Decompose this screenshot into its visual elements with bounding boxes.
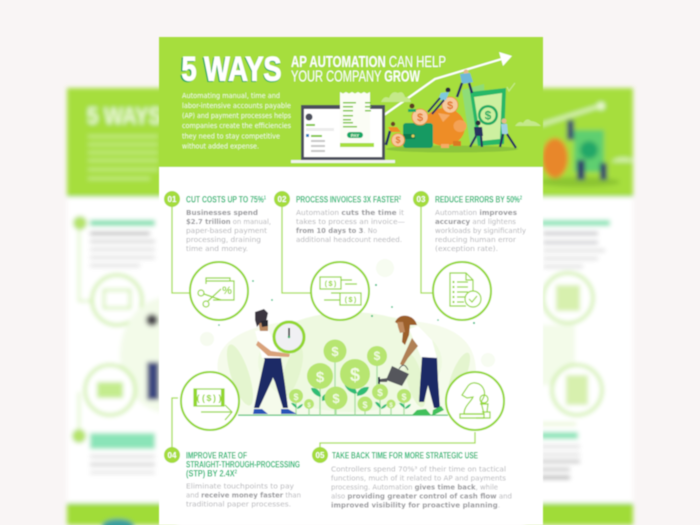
badge 03: 03 bbox=[417, 195, 426, 204]
icon: document with check bbox=[433, 262, 491, 320]
title: 5 WAYS: 5 WAYS bbox=[182, 50, 282, 88]
icon: coins: $ bbox=[395, 135, 401, 145]
heading 01: CUT COSTS UP TO 75% bbox=[186, 194, 294, 206]
body 03 bbox=[435, 209, 526, 253]
subtitle bbox=[291, 54, 446, 86]
panel: blurred back page left bbox=[67, 88, 216, 525]
body 02: Automation cuts the time it bbox=[296, 209, 404, 217]
panel: blurred back page left: 5 WAYS bbox=[87, 103, 162, 130]
section 04 bbox=[164, 372, 301, 508]
icon: clouds bbox=[381, 83, 541, 126]
heading 03: REDUCE ERRORS BY 50% bbox=[435, 194, 556, 206]
body 03: reducing human error bbox=[435, 236, 516, 244]
body 05: functions, much of it related to AP and payments bbox=[331, 474, 506, 482]
body 03: (exception rate). bbox=[435, 245, 498, 253]
body 02: additional headcount needed. bbox=[296, 236, 402, 244]
figure: man with clock bbox=[253, 309, 304, 414]
figure: woman watering bbox=[378, 316, 444, 416]
subtitle: AP AUTOMATION CAN HELP bbox=[291, 54, 446, 71]
illustration: money garden: $ bbox=[374, 349, 381, 363]
body 03: workloads by significantly bbox=[435, 227, 526, 235]
icon: piggy bank bbox=[423, 108, 466, 148]
icon: laptop bbox=[291, 105, 395, 163]
panel: main page bbox=[159, 37, 543, 525]
heading 04: (STP) BY 2.4X bbox=[186, 468, 249, 480]
body 04 bbox=[186, 482, 301, 508]
heading 05: TAKE BACK TIME FOR MORE STRATEGIC USE bbox=[332, 450, 478, 462]
body 04: traditional paper processes. bbox=[186, 500, 291, 508]
body 01: processing, draining bbox=[186, 236, 261, 244]
icon: invoices with dollar: ($) bbox=[324, 281, 337, 289]
body 05 bbox=[331, 466, 512, 510]
badge 04: 04 bbox=[168, 451, 177, 460]
illustration: money garden: $ bbox=[331, 344, 339, 359]
icon: watering can bbox=[378, 365, 409, 386]
illustration: money garden: $ bbox=[401, 392, 407, 402]
illustration: money garden: $ bbox=[332, 391, 340, 406]
body 03: Automation improves bbox=[435, 209, 517, 217]
panel: header banner bbox=[159, 37, 543, 167]
heading 03: 2 bbox=[520, 196, 522, 202]
icon: coins bbox=[392, 97, 458, 146]
icon: receipt bbox=[340, 92, 374, 149]
icon: coins: $ bbox=[447, 100, 453, 112]
body 03: accuracy and lightens bbox=[435, 218, 516, 226]
plant leaves bbox=[291, 383, 411, 409]
heading 04 bbox=[186, 450, 300, 480]
body 02: takes to process an invoice— bbox=[296, 218, 405, 226]
illustration: money garden bbox=[200, 259, 495, 416]
intro text bbox=[182, 92, 291, 150]
body 01 bbox=[186, 209, 271, 253]
icon: invoices with dollar: ($) bbox=[344, 297, 357, 305]
illustration: money garden: $ bbox=[362, 400, 368, 410]
connector bbox=[320, 432, 475, 447]
illustration: money garden: $ bbox=[307, 403, 311, 409]
section 02 bbox=[274, 191, 405, 320]
ground line bbox=[238, 414, 448, 416]
body 01: Businesses spend bbox=[186, 209, 258, 217]
heading 04: IMPROVE RATE OF bbox=[186, 450, 247, 462]
body 01: time and money. bbox=[186, 245, 248, 253]
connector bbox=[421, 199, 433, 293]
stems bbox=[296, 351, 404, 415]
body 05: also providing greater control of cash flow and bbox=[331, 492, 512, 500]
section 03 bbox=[413, 191, 526, 320]
badge 05 bbox=[312, 447, 328, 463]
heading 04: 2 bbox=[235, 470, 237, 476]
connector bbox=[172, 199, 190, 293]
body 01: paper-based payment bbox=[186, 227, 267, 235]
body 05: Controllers spend 70%³ of their time on tactical bbox=[331, 466, 506, 474]
panel: blurred back page right bbox=[525, 88, 633, 525]
dollar coins bbox=[289, 340, 411, 412]
icon: chess knight and pawn bbox=[446, 372, 504, 430]
illustration: money garden: $ bbox=[389, 403, 393, 409]
icon: bill with arrow: (($)) bbox=[195, 394, 223, 404]
icon: wallet bbox=[403, 123, 433, 148]
icon: scissors cutting bills: % bbox=[222, 285, 232, 297]
icon: tiny people bbox=[386, 70, 516, 148]
illustration: money garden: $ bbox=[377, 388, 383, 399]
section 05 bbox=[312, 372, 512, 510]
heading 04: STRAIGHT-THROUGH-PROCESSING bbox=[186, 460, 300, 470]
body 04: and receive money faster than bbox=[186, 492, 301, 500]
intro text: they need to stay competitive bbox=[182, 132, 280, 140]
body 01: $2.7 trillion on manual, bbox=[186, 218, 271, 226]
ground shadow bbox=[386, 146, 518, 152]
connector bbox=[172, 398, 178, 447]
green dots bbox=[218, 280, 475, 326]
subtitle: YOUR COMPANY GROW bbox=[291, 68, 421, 86]
icon: banknotes: $ bbox=[485, 108, 492, 122]
illustration: money garden: $ bbox=[316, 369, 325, 386]
badge 05: 05 bbox=[316, 451, 325, 460]
intro text: companies create the efficiencies bbox=[182, 122, 291, 130]
section 01 bbox=[164, 191, 271, 320]
heading 02: 2 bbox=[399, 196, 401, 202]
icon: banknotes bbox=[462, 84, 506, 146]
connector bbox=[282, 199, 311, 293]
title: 5 WAYS: 5 WAYS bbox=[180, 52, 281, 90]
body 05: processing. Automation gives time back, while bbox=[331, 484, 498, 492]
illustration: money garden: $ bbox=[350, 365, 360, 385]
badge 02: 02 bbox=[278, 195, 287, 204]
body 04: Eliminate touchpoints to pay bbox=[186, 482, 294, 490]
intro text: without added expense. bbox=[182, 142, 259, 150]
intro text: (AP) and payment processes helps bbox=[182, 112, 291, 120]
body 05: improved visibility for proactive planning . bbox=[331, 502, 500, 510]
icon: coins: $ bbox=[417, 112, 423, 124]
background blob bbox=[218, 315, 476, 415]
intro text: labor-intensive accounts payable bbox=[182, 102, 291, 110]
icon: growth arrow bbox=[384, 52, 512, 115]
icon: receipt: PAY bbox=[351, 133, 359, 138]
badge 01: 01 bbox=[168, 195, 177, 204]
intro text: Automating manual, time and bbox=[182, 92, 280, 100]
leaves bbox=[222, 342, 474, 409]
icon: invoices with dollar bbox=[311, 262, 369, 320]
illustration: money garden: $ bbox=[293, 392, 299, 402]
body 02 bbox=[296, 209, 405, 244]
heading 02: PROCESS INVOICES 3X FASTER bbox=[296, 194, 445, 206]
heading 01: 1 bbox=[264, 196, 266, 202]
body 02: from 10 days to 3. No bbox=[296, 227, 377, 235]
